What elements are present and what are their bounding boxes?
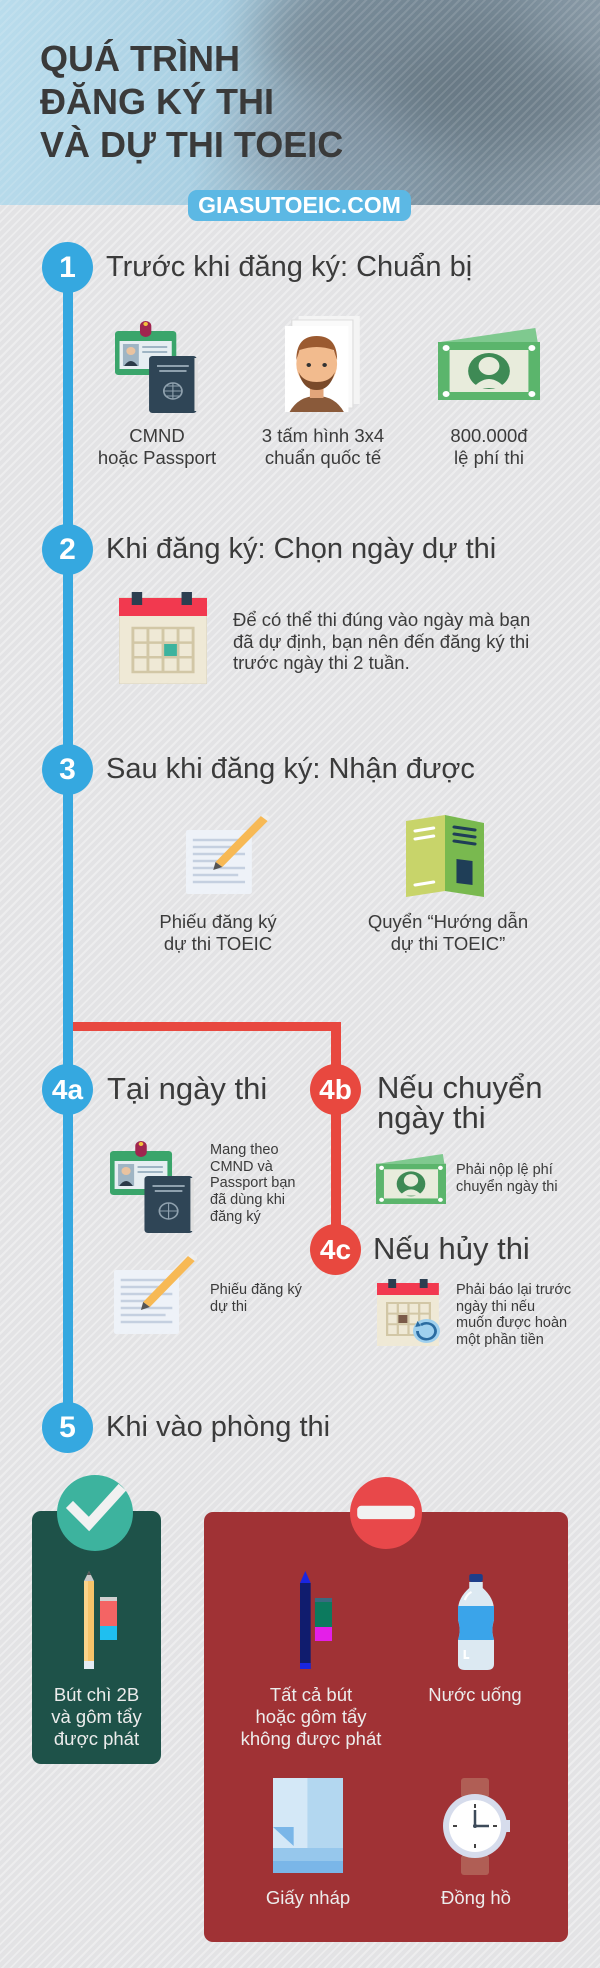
text: 4c: một phần tiền <box>456 1332 544 1348</box>
text: 4c: muốn được hoàn <box>456 1315 567 1331</box>
step 1 number: 1 <box>59 251 76 284</box>
text: 4a id: Passport bạn <box>210 1175 295 1191</box>
text: 4a form <box>210 1282 302 1315</box>
text: 4b: Phải nộp lệ phí <box>456 1162 553 1178</box>
text: step 2 description: đã dự định, bạn nên đến đăng ký thi <box>233 630 529 652</box>
label: pens <box>241 1684 382 1749</box>
icon: pencil and eraser <box>84 1571 117 1669</box>
label: photos: 3 tấm hình 3x4 <box>262 425 384 446</box>
step 5 number: 5 <box>59 1411 76 1444</box>
text: 4c: Phải báo lại trước <box>456 1282 571 1298</box>
text: 4a id: đã dùng khi <box>210 1192 285 1208</box>
icon: pen and eraser <box>300 1571 332 1669</box>
text: 4a id: CMND và <box>210 1159 273 1175</box>
label: pens: hoặc gôm tẩy <box>255 1706 367 1727</box>
step 4a number <box>42 1064 93 1115</box>
icon: booklet <box>406 815 484 897</box>
label: pens: Tất cả bút <box>270 1684 352 1705</box>
step 1 number <box>42 242 93 293</box>
step 5 number <box>42 1402 93 1453</box>
label: fee: 800.000đ <box>450 425 528 446</box>
step 3 number: 3 <box>59 753 76 786</box>
text: 4c: ngày thi nếu <box>456 1299 535 1315</box>
icon: id card and passport <box>115 321 198 413</box>
step 4b heading: Nếu chuyển <box>377 1070 542 1105</box>
label: form: Phiếu đăng ký <box>159 911 277 932</box>
label: allowed: Bút chì 2B <box>54 1684 139 1705</box>
label: booklet <box>368 911 528 954</box>
timeline blue line <box>63 268 73 1428</box>
icon: money <box>438 328 540 400</box>
step 4c <box>310 1224 530 1275</box>
icon: minus circle <box>350 1477 422 1549</box>
step 1 <box>42 242 472 293</box>
title <box>40 38 343 165</box>
step 5 heading: Khi vào phòng thi <box>106 1411 330 1443</box>
label: form: dự thi TOEIC <box>164 933 272 954</box>
icon: calendar refresh <box>377 1279 440 1346</box>
text: step 2 description: Để có thể thi đúng vào ngày mà bạn <box>233 609 530 630</box>
step 2 number: 2 <box>59 533 76 566</box>
step 4c number: 4c <box>320 1234 351 1265</box>
icon: form small <box>114 1254 197 1334</box>
label: booklet: Quyển “Hướng dẫn <box>368 911 528 932</box>
icon: id card and passport small <box>110 1141 194 1233</box>
label: allowed: được phát <box>54 1728 139 1749</box>
icon: water bottle <box>458 1574 494 1670</box>
text: 4a form: dự thi <box>210 1299 247 1315</box>
header photo background <box>0 0 600 205</box>
timeline red branch <box>73 1022 341 1250</box>
step 4b number <box>310 1064 361 1115</box>
label: water: Nước uống <box>428 1684 522 1705</box>
icon: form with pencil <box>186 814 270 894</box>
label: photos: chuẩn quốc tế <box>265 447 381 468</box>
step 4c number <box>310 1224 361 1275</box>
step 4b number: 4b <box>319 1074 352 1105</box>
step 3 heading: Sau khi đăng ký: Nhận được <box>106 753 475 785</box>
step 4a number: 4a <box>52 1074 83 1105</box>
title: ĐĂNG KÝ THI <box>40 81 274 122</box>
step 3 <box>42 744 475 795</box>
label: pens: không được phát <box>241 1728 381 1749</box>
icon: calendar <box>119 592 207 684</box>
label: paper: Giấy nháp <box>266 1887 350 1908</box>
step 4a heading: Tại ngày thi <box>107 1071 267 1106</box>
step 4a <box>42 1064 267 1115</box>
step 2 heading: Khi đăng ký: Chọn ngày dự thi <box>106 533 496 565</box>
label: photos <box>262 425 384 468</box>
title: VÀ DỰ THI TOEIC <box>40 124 343 165</box>
step 5 <box>42 1402 330 1453</box>
icon: scratch paper <box>273 1778 343 1873</box>
text: 4a id <box>210 1142 295 1225</box>
step 4b heading: ngày thi <box>377 1100 486 1135</box>
step 1 heading: Trước khi đăng ký: Chuẩn bị <box>106 251 472 283</box>
label: allowed: và gôm tẩy <box>51 1706 142 1727</box>
label: form <box>159 911 277 954</box>
text: 4a form: Phiếu đăng ký <box>210 1282 302 1298</box>
label: watch: Đồng hồ <box>441 1887 511 1908</box>
panel: allowed <box>32 1511 161 1764</box>
panel: not allowed <box>204 1512 568 1942</box>
step 2 <box>42 524 496 575</box>
text: step 2 description <box>233 609 530 673</box>
step 4c heading: Nếu hủy thi <box>373 1231 530 1266</box>
icon: watch <box>443 1778 510 1875</box>
label: id: hoặc Passport <box>98 447 216 468</box>
label: booklet: dự thi TOEIC” <box>391 933 505 954</box>
step 2 number <box>42 524 93 575</box>
badge: website: GIASUTOEIC.COM <box>198 192 401 218</box>
text: 4a id: Mang theo <box>210 1142 279 1158</box>
step 4b heading <box>377 1070 542 1135</box>
text: 4a id: đăng ký <box>210 1209 261 1225</box>
icon: money small <box>376 1154 446 1204</box>
icon: check circle <box>57 1475 133 1551</box>
step 3 number <box>42 744 93 795</box>
label: fee: lệ phí thi <box>454 447 524 468</box>
label: id: CMND <box>129 425 185 446</box>
icon: photos <box>285 316 360 412</box>
text: 4b <box>456 1162 558 1195</box>
label: allowed <box>51 1684 142 1749</box>
text: step 2 description: trước ngày thi 2 tuần. <box>233 652 410 673</box>
text: 4b: chuyển ngày thi <box>456 1179 558 1195</box>
title: QUÁ TRÌNH <box>40 38 240 79</box>
step 4b <box>310 1064 542 1135</box>
text: 4c <box>456 1282 571 1348</box>
label: fee <box>450 425 528 468</box>
label: id <box>98 425 216 468</box>
